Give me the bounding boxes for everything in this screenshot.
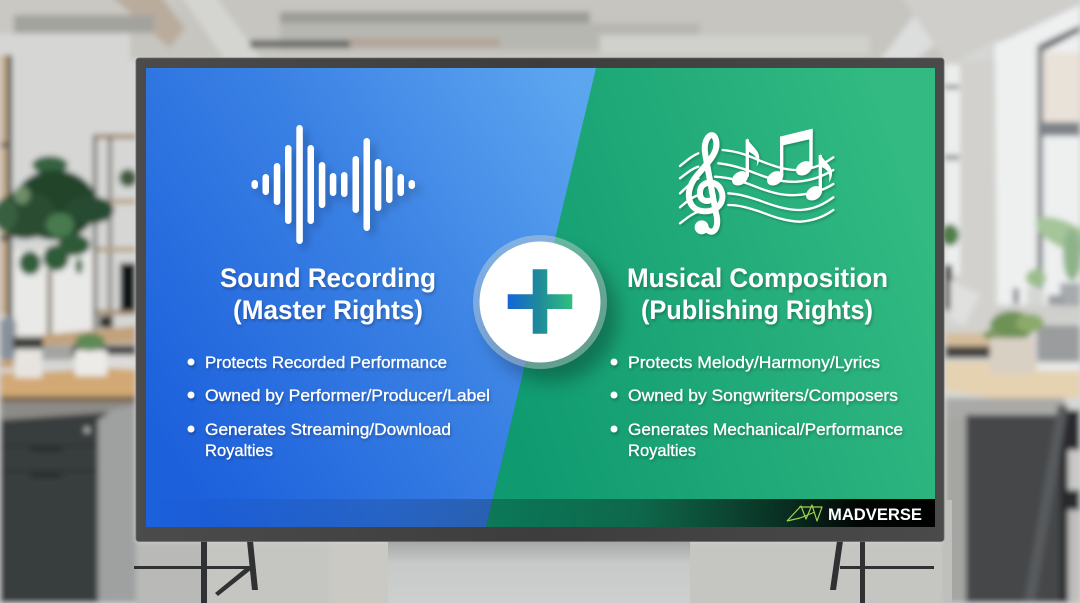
- pots: [15, 350, 42, 378]
- monitor stand: [388, 541, 690, 603]
- icon: music staff with notes: [680, 129, 833, 234]
- left heading: [220, 263, 436, 325]
- right heading: (Publishing Rights): [641, 295, 873, 325]
- icon: sound wave: [252, 125, 415, 244]
- monitor bezel: [136, 58, 944, 542]
- right heading: [627, 263, 888, 325]
- logo mark: [787, 505, 822, 521]
- table legs under the monitor: [134, 500, 952, 603]
- fig plant: [47, 270, 52, 335]
- logo: Madverse: MADVERSE: [828, 506, 922, 524]
- right bullet list: Protects Melody/Harmony/Lyrics: [628, 353, 880, 372]
- right heading: Musical Composition: [627, 263, 888, 293]
- right back desk and chair: [945, 333, 993, 346]
- left bullet list: Protects Recorded Performance: [205, 353, 447, 372]
- right bullet list: Owned by Songwriters/Composers: [628, 386, 898, 405]
- left heading: Sound Recording: [220, 263, 436, 293]
- left window: [0, 55, 8, 315]
- floor: [136, 541, 946, 603]
- logo: Madverse: [787, 505, 922, 524]
- front desk: [0, 368, 136, 399]
- right plants: [1031, 210, 1080, 260]
- left bullet list: Owned by Performer/Producer/Label: [205, 386, 490, 405]
- back desk: [0, 318, 16, 360]
- cabinet: [0, 405, 136, 603]
- shelf: [93, 134, 136, 139]
- left bullet list: [188, 353, 490, 460]
- right desk: [945, 362, 1080, 398]
- left heading: (Master Rights): [233, 295, 423, 325]
- icon: plus sign: [508, 269, 572, 334]
- right windows: [945, 65, 960, 275]
- footer bar: [146, 499, 935, 527]
- plus badge: [473, 235, 618, 382]
- screen panel: musical composition: [486, 68, 935, 527]
- right bullet list: Royalties: [628, 441, 696, 460]
- left bullet list: Generates Streaming/Download: [205, 420, 451, 439]
- monitor: [136, 58, 944, 542]
- screen panel: sound recording: [146, 68, 597, 527]
- right bullet list: Generates Mechanical/Performance: [628, 420, 903, 439]
- right bullet list: [610, 353, 903, 460]
- left bullet list: Royalties: [205, 441, 273, 460]
- pot plant: [990, 311, 1034, 341]
